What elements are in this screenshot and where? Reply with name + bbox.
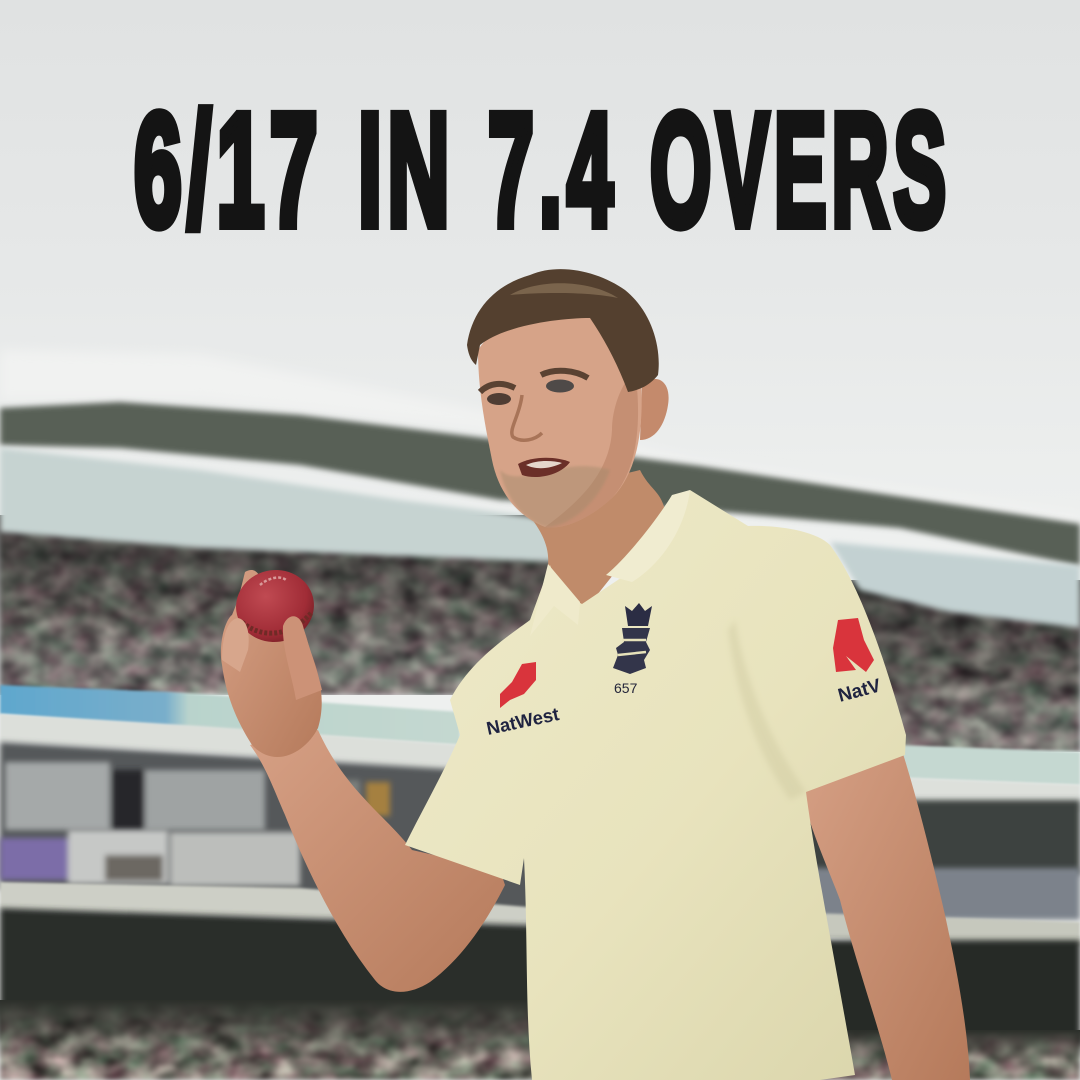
grey panel: [105, 855, 163, 881]
cheek shadow: [545, 370, 638, 527]
bank logo red mark: [500, 662, 536, 708]
stadium roof dark band: [0, 402, 1080, 566]
right arm: [802, 738, 970, 1080]
lower level pillars: [5, 762, 390, 832]
stubble: [500, 466, 610, 527]
shirt collar: [606, 490, 690, 582]
balcony right: [905, 778, 1080, 812]
ball stamp: [260, 578, 286, 585]
shirt: [405, 490, 906, 1080]
hand holding ball: [221, 570, 322, 757]
white wall: [68, 830, 168, 884]
background: blurred stadium: [0, 350, 1080, 1080]
chest sponsor text: NatWest: [484, 703, 561, 739]
left eye: [487, 393, 511, 405]
right eyebrow: [541, 371, 588, 378]
crowd right: [850, 580, 1080, 752]
lower level right: [780, 800, 1080, 875]
ledge right: [780, 912, 1080, 946]
headline word 2: IN: [358, 80, 455, 259]
right eye: [546, 380, 574, 392]
dark tier left: [0, 908, 560, 1040]
face: [478, 311, 642, 527]
lower level left: [0, 742, 550, 920]
shirt shading: [728, 620, 806, 800]
left eyebrow: [480, 384, 515, 392]
pillar panel 2: [145, 770, 265, 830]
crowd bottom left: [0, 1000, 560, 1080]
purple sign: [0, 838, 68, 880]
crowd bottom right: [780, 1030, 1080, 1080]
dark tier right: [780, 940, 1080, 1045]
crowd shade right: [850, 580, 1080, 752]
chest sponsor logo: [484, 662, 561, 739]
pillar panel 1: [5, 762, 110, 830]
hair highlight: [510, 283, 618, 298]
cap number: 657: [614, 680, 638, 696]
ear: [640, 379, 669, 440]
headline word 3: 7.4: [488, 80, 618, 259]
crown: [625, 603, 652, 626]
three lions crest: [613, 603, 652, 696]
balcony left: [0, 714, 460, 772]
bank logo red mark: [833, 618, 874, 672]
hair: [467, 269, 659, 392]
crest light stripes: [618, 640, 646, 655]
dark doorway: [112, 770, 144, 830]
crowd texture right: [850, 580, 1080, 752]
crest lions: [613, 628, 650, 674]
crowd fade bottom left: [0, 1000, 560, 1060]
crowd texture bottom right: [780, 1030, 1080, 1080]
nose: [512, 395, 542, 440]
ball body: [231, 565, 319, 647]
crowd shade left: [0, 515, 560, 695]
collar left flap: [530, 564, 580, 636]
player: [221, 269, 970, 1080]
crowd texture left: [0, 515, 560, 695]
ledge left: [0, 882, 540, 926]
crowd left: [0, 515, 560, 695]
stadium roof top edge: [0, 350, 1080, 530]
left arm: [250, 730, 505, 992]
finger under ball: [222, 618, 249, 672]
crowd middle right: [780, 868, 1080, 920]
orange glow: [366, 782, 390, 816]
panel 3: [300, 780, 360, 832]
crowd texture bottom left: [0, 1000, 560, 1080]
upper stand canopy left: [0, 448, 560, 562]
thumb over ball: [283, 616, 322, 700]
upper stand canopy right: [830, 542, 1080, 628]
ball seam: [242, 612, 312, 633]
head: [467, 269, 669, 527]
lower panels: [0, 830, 300, 886]
white panel: [170, 832, 300, 886]
headline: [134, 80, 951, 259]
mouth: [518, 458, 570, 477]
neck: [515, 470, 665, 610]
advertising banner right: [900, 745, 1080, 785]
advertising banner left: [0, 685, 460, 745]
crowd fade bottom right: [780, 1030, 1080, 1060]
right sleeve logo: [833, 618, 883, 707]
cricket ball: [231, 565, 319, 647]
headline word 1: 6/17: [134, 80, 323, 259]
sleeve sponsor text: NatV: [836, 675, 883, 707]
teeth: [526, 461, 562, 468]
